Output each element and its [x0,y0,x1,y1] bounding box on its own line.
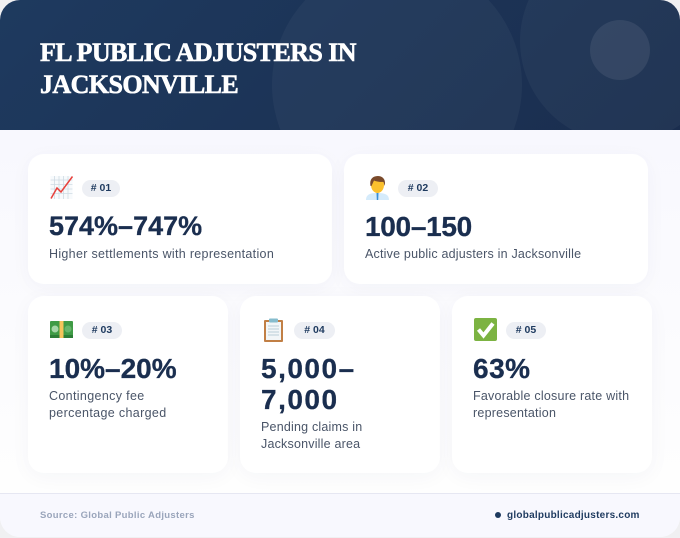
badge 01: # 01 [91,182,111,194]
badge 02 [398,180,438,197]
description [473,389,629,420]
value [261,353,356,415]
description: percentage charged [49,406,166,420]
website dot [495,512,501,518]
badge 03: # 03 [92,324,112,336]
value: 10%–20% [49,353,177,384]
badge 02: # 02 [408,182,428,194]
value: 100–150 [365,211,472,242]
panel: stat 03 [28,296,228,473]
description: Jacksonville area [261,437,360,451]
source: Source: Global Public Adjusters [40,510,195,521]
description: Active public adjusters in Jacksonville [365,247,581,261]
panel: stat 01 [28,154,332,284]
badge 04 [294,322,335,339]
description: representation [473,406,556,420]
description: Higher settlements with representation [49,247,274,261]
icon: clipboard [264,318,283,342]
badge 05: # 05 [516,324,536,336]
badge 04: # 04 [304,324,325,336]
footer [0,493,680,537]
description [49,389,166,420]
value: 63% [473,353,531,384]
description: Contingency fee [49,389,145,403]
description: Pending claims in [261,420,362,434]
website: globalpublicadjusters.com [507,510,640,521]
description: Favorable closure rate with [473,389,629,403]
title: FL PUBLIC ADJUSTERS IN [40,38,356,67]
icon: dollar banknote [50,321,73,338]
icon: office worker [366,176,389,200]
description [261,420,362,451]
value: 7,000 [261,384,339,415]
header banner [0,0,680,130]
icon: chart increasing [50,176,73,199]
value: 5,000– [261,353,356,384]
value: 574%–747% [49,211,202,241]
badge 05 [506,322,546,339]
title [40,38,356,99]
panel: stat 04 [240,296,440,473]
icon: check mark [474,318,497,341]
badge 01 [82,180,120,197]
panel: stat 02 [344,154,648,284]
badge 03 [82,322,122,339]
panel: stat 05 [452,296,652,473]
title: JACKSONVILLE [40,70,238,99]
